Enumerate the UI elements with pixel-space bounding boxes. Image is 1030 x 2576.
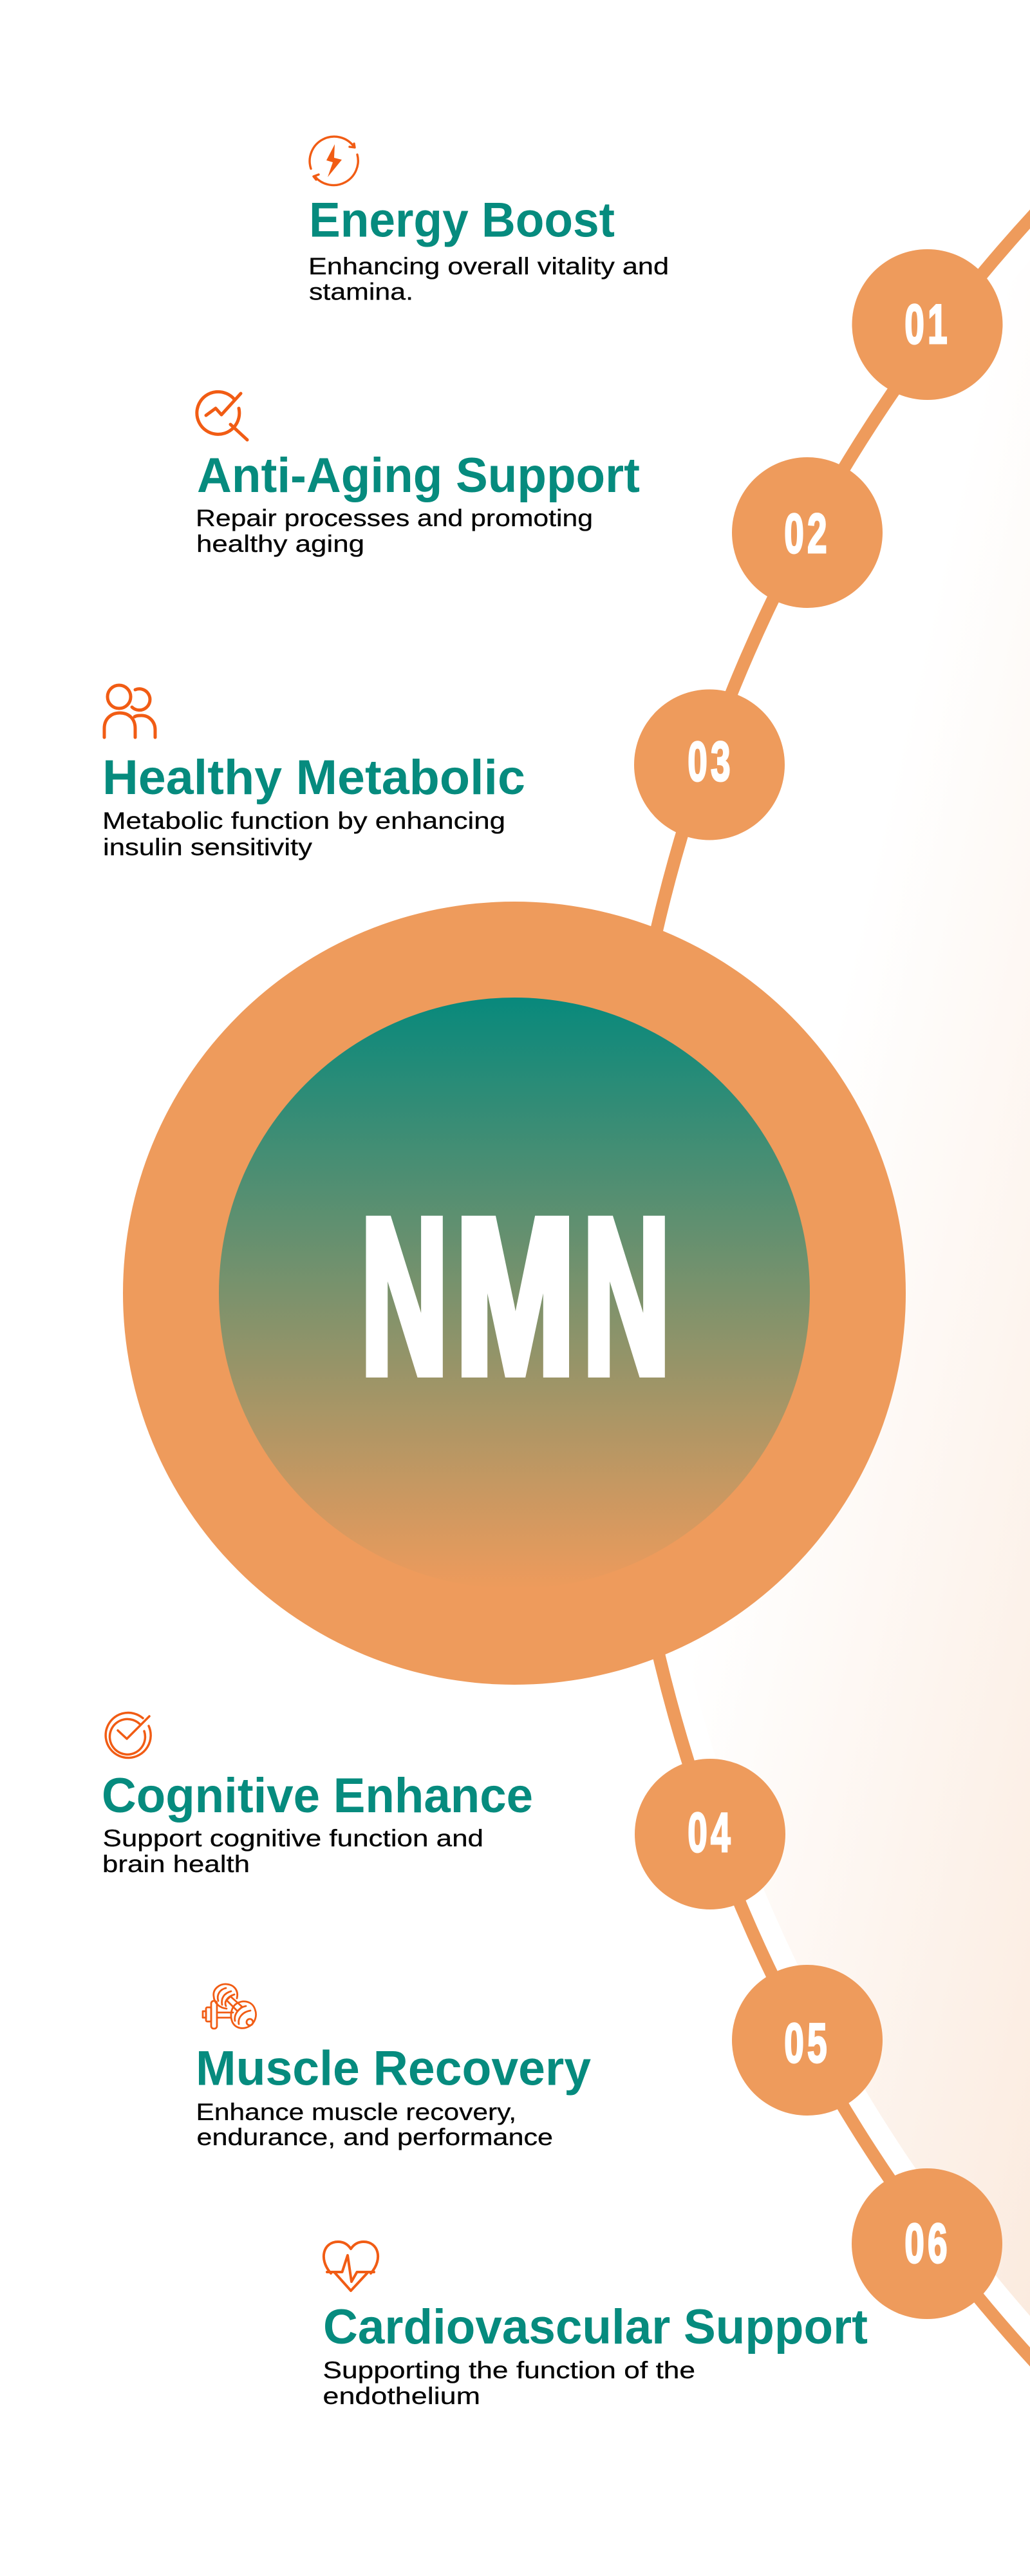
text: Anti-Aging description bbox=[196, 505, 593, 557]
number badge 05 bbox=[732, 1965, 883, 2116]
text: Anti-Aging description: Repair processes and promoting bbox=[196, 505, 593, 531]
central circle: inner gradient bbox=[219, 998, 810, 1589]
connecting arc line bbox=[616, 205, 1030, 2371]
background peach arc shape bbox=[643, 245, 1030, 2331]
number badge 04: 04 bbox=[688, 1803, 734, 1864]
number badge 06: 06 bbox=[904, 2213, 951, 2275]
text: Anti-Aging description: healthy aging bbox=[196, 531, 364, 557]
text: Muscle Recovery description bbox=[196, 2099, 553, 2150]
heading: Muscle Recovery: Muscle Recovery bbox=[196, 2041, 591, 2096]
title: NMN: M bbox=[456, 1174, 574, 1418]
text: Cardiovascular description bbox=[323, 2357, 695, 2409]
text: Energy Boost description: Enhancing overall vitality and bbox=[308, 253, 669, 279]
icon: energy bolt in cycle arrows bbox=[310, 137, 358, 185]
text: Healthy Metabolic description bbox=[102, 808, 505, 860]
icon: heart with pulse bbox=[324, 2242, 378, 2291]
text: Cognitive description: brain health bbox=[102, 1851, 250, 1877]
number badge 03: 03 bbox=[688, 732, 734, 793]
text: Cognitive description: Support cognitive function and bbox=[103, 1825, 483, 1852]
heading: Cognitive Enhance: Cognitive Enhance bbox=[102, 1768, 533, 1823]
text: Energy Boost description bbox=[308, 253, 669, 305]
text: Cardiovascular description: Supporting the function of the bbox=[323, 2357, 695, 2383]
number badge 02: 02 bbox=[784, 504, 830, 565]
title: NMN: N bbox=[360, 1174, 447, 1418]
text: Energy Boost description: stamina. bbox=[309, 278, 413, 305]
heading: Anti-Aging Support: Anti-Aging Support bbox=[197, 448, 640, 503]
number badge 06 bbox=[852, 2168, 1002, 2319]
text: Muscle Recovery description: endurance, and performance bbox=[197, 2124, 553, 2150]
icon: check mark in double ring bbox=[106, 1713, 151, 1758]
number badge 01: 01 bbox=[904, 294, 951, 355]
number badge 05: 05 bbox=[784, 2013, 830, 2074]
heading: Cardiovascular Support: Cardiovascular Support bbox=[323, 2300, 868, 2354]
number badge 04 bbox=[635, 1759, 785, 1909]
text: Healthy Metabolic description: insulin sensitivity bbox=[103, 834, 313, 860]
number badge 02 bbox=[732, 457, 883, 608]
title: NMN: N bbox=[583, 1174, 670, 1418]
number badge 01 bbox=[852, 249, 1003, 400]
title: NMN bbox=[360, 1174, 670, 1418]
text: Cardiovascular description: endothelium bbox=[323, 2383, 480, 2409]
text: Cognitive description bbox=[102, 1825, 483, 1877]
heading: Energy Boost: Energy Boost bbox=[309, 193, 615, 247]
central circle: outer ring bbox=[123, 902, 906, 1685]
text: Muscle Recovery description: Enhance muscle recovery, bbox=[196, 2099, 516, 2125]
icon: two people bbox=[104, 685, 155, 737]
icon: magnifier with chart bbox=[197, 392, 247, 440]
icon: dumbbells bbox=[203, 1984, 256, 2029]
text: Healthy Metabolic description: Metabolic function by enhancing bbox=[102, 808, 505, 834]
heading: Healthy Metabolic: Healthy Metabolic bbox=[102, 750, 525, 805]
number badge 03 bbox=[634, 689, 785, 840]
